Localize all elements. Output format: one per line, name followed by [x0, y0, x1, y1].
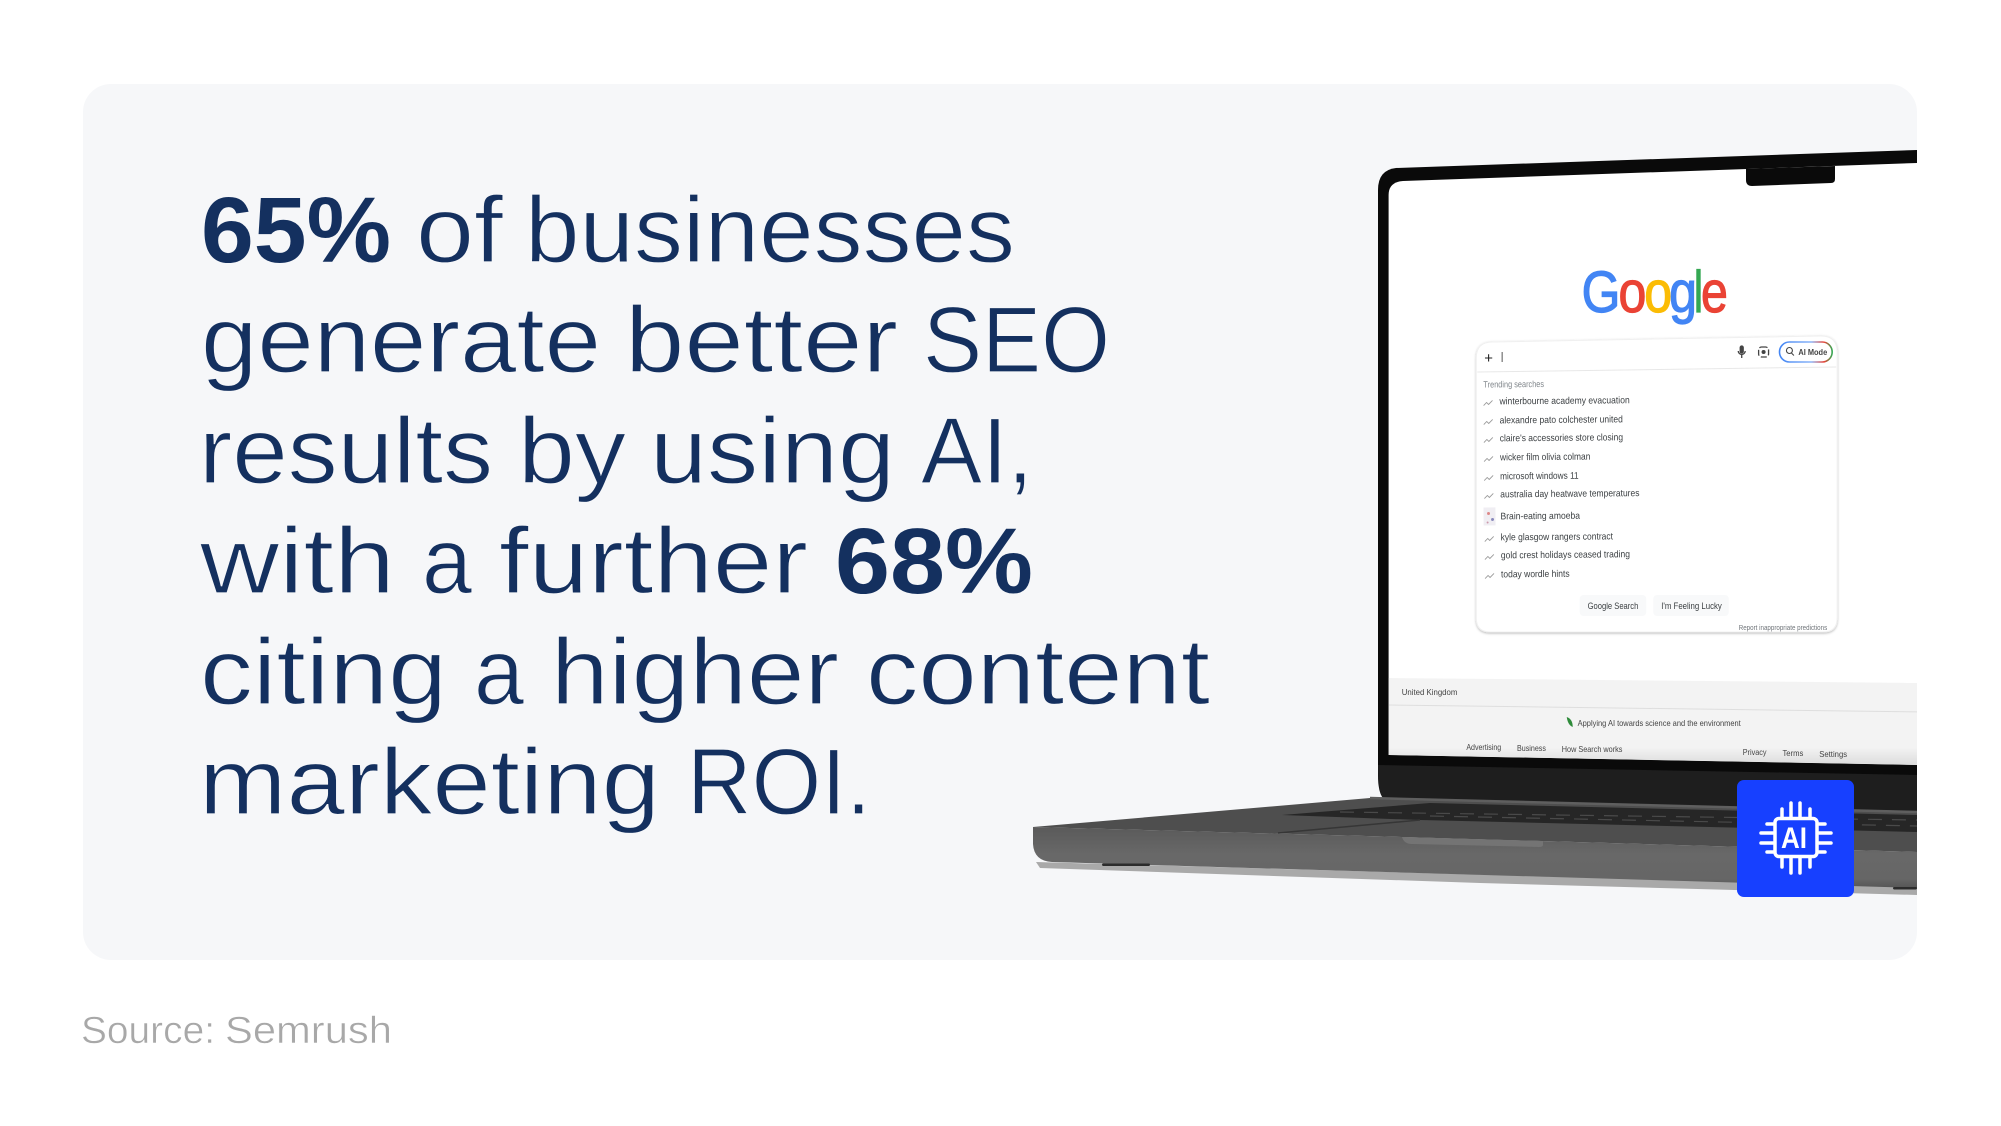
trending searches list: gold crest holidays ceased trading: [1501, 549, 1630, 561]
laptop illustration: [1033, 150, 1925, 895]
headline text: 65%: [201, 178, 391, 282]
screen footer: How Search works: [1562, 744, 1622, 754]
AI mode pill: AI Mode: [1798, 347, 1827, 357]
icon: AI chip: [1761, 803, 1831, 873]
trending searches list: microsoft windows 11: [1500, 471, 1579, 482]
AI badge: [1737, 780, 1854, 897]
headline text: SEO: [923, 287, 1110, 392]
headline text: further: [499, 508, 808, 613]
search buttons: I'm Feeling Lucky: [1661, 601, 1722, 611]
keyboard: [1282, 803, 1917, 832]
panel: background card: [83, 84, 1917, 960]
amoeba thumbnail: [1483, 507, 1496, 526]
headline text: businesses: [525, 177, 1015, 282]
headline text: citing: [200, 619, 447, 724]
screen footer: Advertising: [1466, 742, 1501, 752]
source note: [81, 1010, 392, 1052]
laptop feet: [1102, 864, 1917, 890]
plus and cursor: +: [1484, 350, 1493, 367]
icon: leaf: [1567, 717, 1573, 727]
headline text: ROI.: [687, 729, 871, 834]
source note: Source:: [81, 1010, 215, 1052]
trackpad edge: [1278, 820, 1420, 833]
headline text: with: [199, 508, 395, 613]
camera notch: [1746, 166, 1835, 186]
headline text: better: [625, 287, 898, 392]
headline text: using: [650, 398, 895, 503]
trending searches list: wicker film olivia colman: [1499, 452, 1590, 463]
headline text: a: [422, 508, 473, 613]
screen contents: [1389, 261, 1925, 765]
trending searches list: claire's accessories store closing: [1500, 432, 1623, 444]
headline text: generate: [201, 287, 601, 392]
screen footer: [1389, 678, 1925, 765]
Google logo: o: [1644, 261, 1672, 325]
screen footer: Privacy: [1743, 747, 1767, 757]
laptop base front: [1033, 827, 1917, 888]
trending searches list: Trending searches: [1483, 379, 1545, 390]
icon: microphone: [1738, 346, 1745, 358]
Google logo: g: [1669, 261, 1697, 325]
trending searches list: today wordle hints: [1501, 569, 1570, 580]
trend icons: [1484, 400, 1494, 579]
trending searches list: alexandre pato colchester united: [1500, 414, 1623, 426]
headline text: a: [474, 619, 525, 724]
search box divider: [1477, 367, 1836, 372]
search buttons: Google Search: [1588, 601, 1638, 611]
screen: [1389, 163, 1917, 765]
icon: lens: [1759, 347, 1769, 357]
AI badge: AI: [1781, 822, 1807, 855]
thumb notch: [1402, 837, 1543, 847]
headline text: [199, 177, 1210, 834]
lid chin: [1378, 765, 1917, 812]
AI mode pill: [1779, 342, 1832, 362]
source note: Semrush: [225, 1010, 392, 1052]
screen footer: United Kingdom: [1402, 687, 1457, 697]
headline text: results: [199, 398, 493, 503]
trending searches list: [1482, 378, 1640, 581]
screen footer: Business: [1517, 743, 1546, 753]
Google logo: G: [1582, 261, 1620, 325]
report link: Report inappropriate predictions: [1739, 623, 1827, 632]
search buttons: [1588, 602, 1722, 611]
screen footer: Terms: [1782, 748, 1803, 758]
headline text: by: [518, 398, 626, 503]
headline text: 68%: [835, 509, 1033, 613]
headline text: higher: [551, 619, 839, 724]
headline text: content: [866, 619, 1210, 724]
laptop shadow: [1036, 862, 1917, 895]
trending searches list: australia day heatwave temperatures: [1500, 488, 1640, 500]
headline text: AI,: [921, 398, 1033, 503]
Google logo: l: [1694, 261, 1703, 325]
Google logo: o: [1618, 261, 1646, 325]
Google logo: e: [1701, 261, 1728, 325]
Google logo: [1584, 268, 1726, 325]
laptop lid: [1378, 150, 1917, 812]
headline text: of: [416, 177, 504, 282]
laptop deck: [1033, 798, 1917, 852]
hinge highlight: [1370, 798, 1917, 812]
trending searches list: Brain-eating amoeba: [1500, 511, 1581, 522]
trending searches list: kyle glasgow rangers contract: [1501, 531, 1613, 543]
search box: [1476, 336, 1837, 632]
headline text: marketing: [199, 729, 660, 834]
trending searches list: winterbourne academy evacuation: [1499, 395, 1630, 407]
screen footer: Settings: [1819, 749, 1847, 759]
screen footer: Applying AI towards science and the environment: [1578, 718, 1741, 728]
